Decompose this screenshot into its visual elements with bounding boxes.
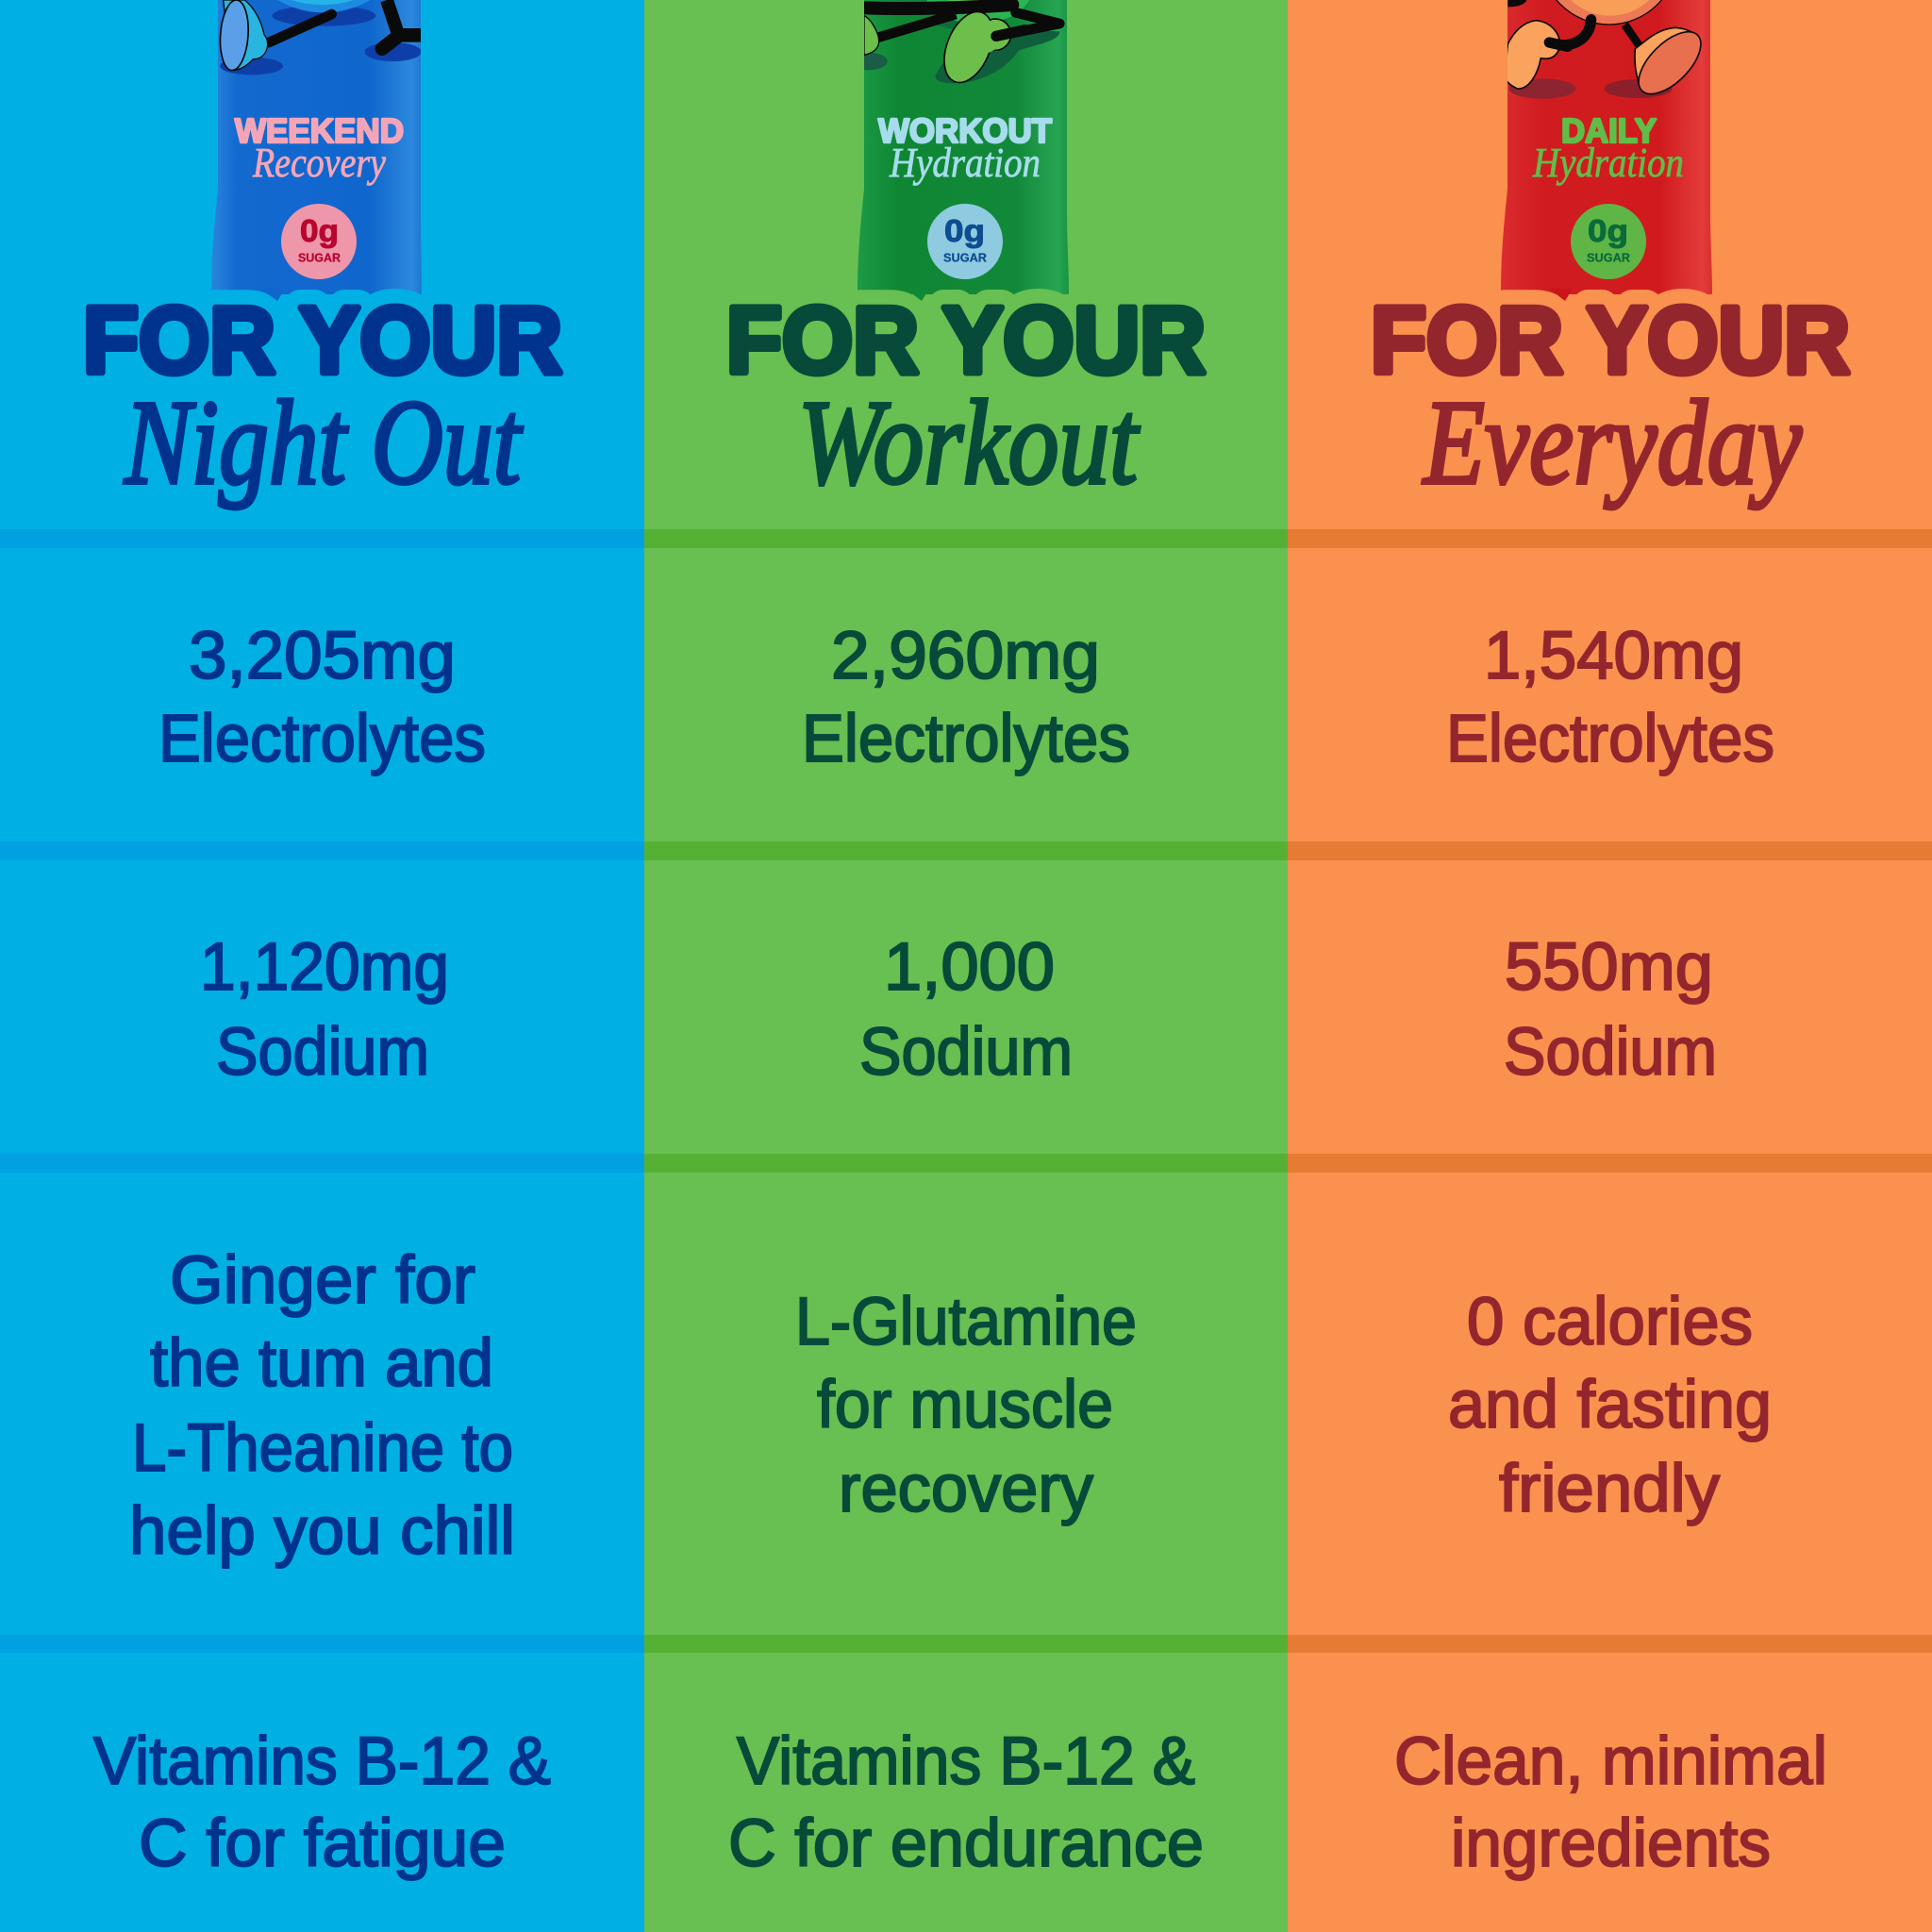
panel: everyday column <box>1288 0 1932 1932</box>
benefit row: night out: L-Theanine to <box>132 1411 513 1486</box>
electrolytes row: workout: Electrolytes <box>802 702 1130 776</box>
pouch label: recovery: Recovery <box>252 140 386 186</box>
electrolytes row: everyday: 1,540mg <box>1484 619 1743 693</box>
heading: for your night out: FOR YOUR <box>83 288 562 393</box>
vitamins row: night out: C for fatigue <box>139 1807 506 1881</box>
badge: 0g sugar <box>281 204 357 279</box>
benefit row: everyday: and fasting <box>1448 1368 1772 1442</box>
benefit row: workout <box>795 1285 1137 1526</box>
badge: 0g sugar: SUGAR <box>298 251 341 264</box>
pouch: workout hydration <box>848 0 1069 294</box>
benefit row: night out: Ginger for <box>170 1243 475 1318</box>
badge: 0g sugar <box>927 204 1003 279</box>
ingredients row: everyday: ingredients <box>1451 1807 1771 1881</box>
heading: for your workout <box>726 288 1206 509</box>
badge: 0g sugar: 0g <box>300 213 339 248</box>
cartoon legs: workout hydration <box>864 0 1065 83</box>
benefit row: night out: the tum and <box>150 1326 493 1401</box>
sodium row: workout: Sodium <box>859 1015 1073 1090</box>
heading: for your workout: FOR YOUR <box>726 288 1206 393</box>
heading: for your everyday: FOR YOUR <box>1371 288 1850 393</box>
sodium row: workout: 1,000 <box>884 930 1055 1005</box>
sodium row: everyday: Sodium <box>1504 1015 1717 1090</box>
heading: for your night out <box>83 288 562 509</box>
vitamins row: night out: Vitamins B-12 & <box>93 1724 551 1799</box>
benefit row: everyday: 0 calories <box>1467 1285 1753 1359</box>
sodium row: night out: Sodium <box>216 1015 429 1090</box>
ingredients row: everyday <box>1394 1724 1827 1881</box>
electrolytes row: everyday <box>1446 619 1774 776</box>
pouch label: hydration: Hydration <box>889 140 1041 186</box>
electrolytes row: night out: 3,205mg <box>189 619 456 693</box>
pouch label: daily: DAILY <box>1561 111 1657 150</box>
vitamins row: workout: Vitamins B-12 & <box>737 1724 1195 1799</box>
cartoon legs: weekend recovery <box>215 0 429 75</box>
pouch: daily hydration <box>1501 0 1712 294</box>
benefit row: everyday <box>1448 1285 1772 1526</box>
sodium row: workout <box>859 930 1073 1090</box>
heading: for your everyday <box>1371 288 1850 509</box>
panel: workout column <box>644 0 1288 1932</box>
heading: for your workout: FOR YOUR <box>726 288 1206 393</box>
badge: 0g sugar: SUGAR <box>1587 251 1630 264</box>
ingredients row: everyday: Clean, minimal <box>1394 1724 1827 1799</box>
cartoon legs: daily hydration <box>1507 0 1702 99</box>
benefit row: everyday: friendly <box>1499 1452 1720 1526</box>
pouch label: workout: WORKOUT <box>878 111 1052 150</box>
benefit row: night out: help you chill <box>129 1494 515 1569</box>
sodium row: everyday <box>1504 930 1717 1090</box>
heading: for your night out: Night Out <box>124 375 524 509</box>
sodium row: night out <box>200 930 449 1090</box>
benefit row: night out <box>129 1243 515 1569</box>
vitamins row: workout: C for endurance <box>728 1807 1204 1881</box>
heading: for your workout: Workout <box>798 375 1141 509</box>
electrolytes row: night out: Electrolytes <box>158 702 486 776</box>
heading: for your night out: FOR YOUR <box>83 288 562 393</box>
panel: night out column <box>0 0 644 1932</box>
sodium row: everyday: 550mg <box>1505 930 1713 1005</box>
benefit row: workout: for muscle <box>817 1368 1113 1442</box>
benefit row: workout: recovery <box>839 1452 1093 1526</box>
heading: for your everyday: Everyday <box>1422 375 1802 509</box>
vitamins row: workout <box>728 1724 1204 1881</box>
electrolytes row: workout: 2,960mg <box>831 619 1100 693</box>
pouch label: weekend: WEEKEND <box>235 111 404 150</box>
heading: for your everyday: FOR YOUR <box>1371 288 1850 393</box>
electrolytes row: workout <box>802 619 1130 776</box>
badge: 0g sugar: 0g <box>944 213 985 248</box>
pouch label: hydration: Hydration <box>1532 140 1684 186</box>
badge: 0g sugar: SUGAR <box>943 251 987 264</box>
sodium row: night out: 1,120mg <box>200 930 449 1005</box>
electrolytes row: night out <box>158 619 486 776</box>
badge: 0g sugar <box>1571 204 1646 279</box>
badge: 0g sugar: 0g <box>1588 213 1628 248</box>
vitamins row: night out <box>93 1724 551 1881</box>
electrolytes row: everyday: Electrolytes <box>1446 702 1774 776</box>
pouch: weekend recovery <box>211 0 429 294</box>
benefit row: workout: L-Glutamine <box>795 1285 1137 1359</box>
